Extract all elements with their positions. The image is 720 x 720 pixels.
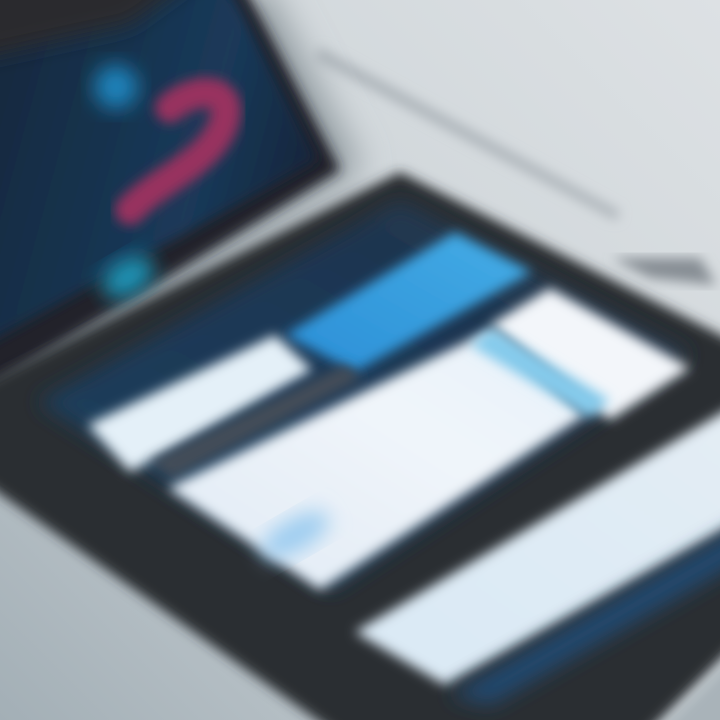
tablet frame <box>0 0 340 405</box>
bottom right panel <box>355 390 720 685</box>
cyan dot bottom <box>95 247 161 307</box>
lower right background <box>650 650 720 720</box>
blue edge <box>450 515 720 705</box>
top dark band <box>0 0 220 62</box>
red question mark <box>130 93 226 210</box>
front tablet <box>0 172 720 720</box>
dark divider <box>150 365 362 478</box>
tablet body <box>0 172 720 720</box>
back tablet <box>0 0 340 405</box>
light blue spot <box>254 502 336 568</box>
stylus <box>315 48 716 285</box>
cyan dot top <box>94 65 138 109</box>
left white panel <box>88 335 312 472</box>
dark screen <box>38 200 690 590</box>
right white panel <box>490 288 690 420</box>
tablet screen <box>0 0 318 358</box>
light blue bar <box>470 328 610 418</box>
main white panel <box>168 330 585 590</box>
shadow under back tablet <box>0 0 360 420</box>
blue bar <box>285 232 532 372</box>
